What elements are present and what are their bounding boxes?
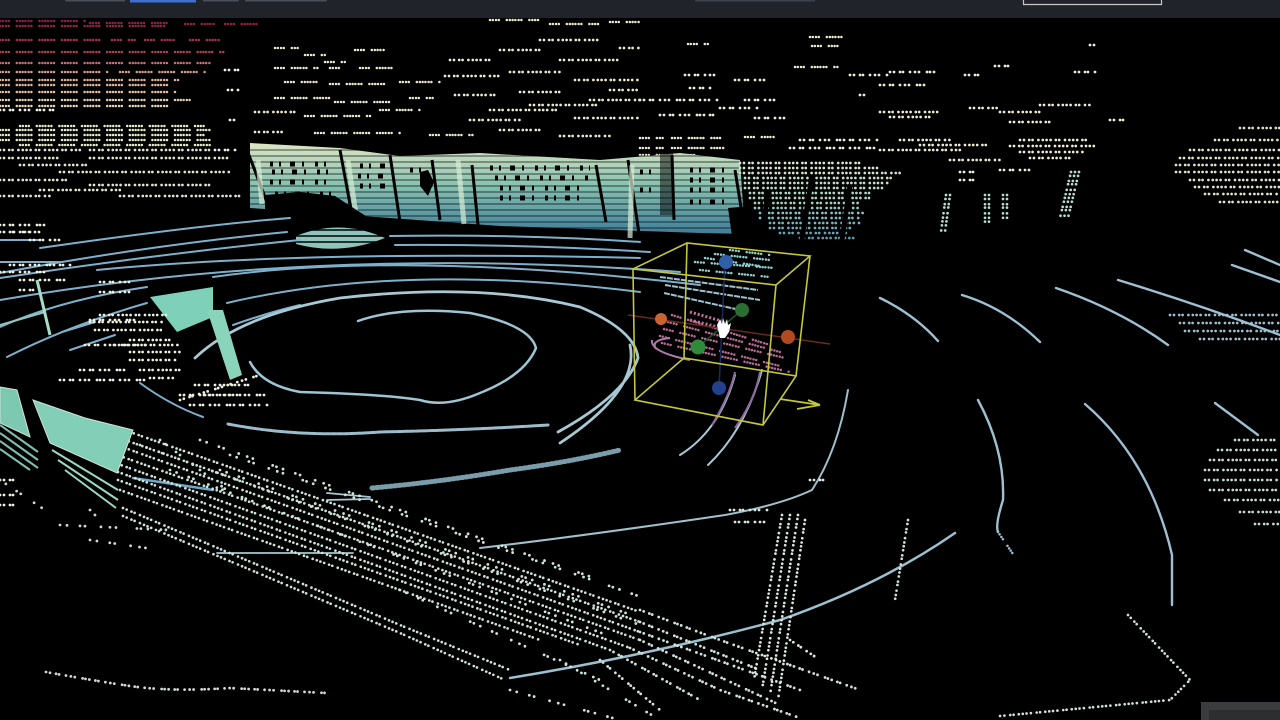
corner panel bbox=[1201, 702, 1280, 720]
right side tree and building clusters bbox=[1170, 128, 1280, 524]
gizmo handles bbox=[719, 255, 733, 269]
scan lines inside box bbox=[660, 277, 760, 310]
tree trunks and gaps bbox=[247, 150, 745, 240]
main inner rings bbox=[133, 292, 955, 678]
top toolbar bbox=[0, 0, 1280, 18]
signboard and post bbox=[37, 280, 242, 380]
hand cursor bbox=[717, 318, 731, 338]
3D selection box bbox=[628, 243, 830, 428]
right wall posts bbox=[941, 172, 1079, 232]
teal fence panel bbox=[33, 400, 133, 473]
bottom ground scatter bbox=[0, 480, 326, 693]
pink selected points bbox=[660, 315, 790, 372]
ground rings crossing box bbox=[712, 372, 760, 428]
speckled wall right part bbox=[740, 163, 900, 238]
dark car shadow and car points bbox=[265, 192, 390, 249]
building facade points, upper left bbox=[0, 21, 262, 196]
tree canopy points, right bbox=[640, 37, 1130, 180]
fence diagonal point band bbox=[0, 387, 860, 720]
left teal block bbox=[0, 387, 30, 437]
right ground arcs bbox=[880, 250, 1280, 716]
tree canopy points, centre bbox=[255, 20, 640, 136]
gizmo axes bbox=[628, 315, 830, 344]
yellow direction arrow bbox=[780, 399, 820, 409]
pale pillars bbox=[258, 160, 632, 238]
scan line texture bbox=[250, 150, 745, 228]
fence lower stream bbox=[123, 508, 510, 680]
main fence band bbox=[118, 432, 640, 650]
scattered vegetation points, left bbox=[0, 225, 270, 505]
wireframe cube bbox=[633, 243, 810, 425]
teal wall behind trees bbox=[247, 143, 1079, 240]
pole point band bbox=[730, 480, 830, 700]
concentric ground rings, left bbox=[0, 218, 700, 417]
